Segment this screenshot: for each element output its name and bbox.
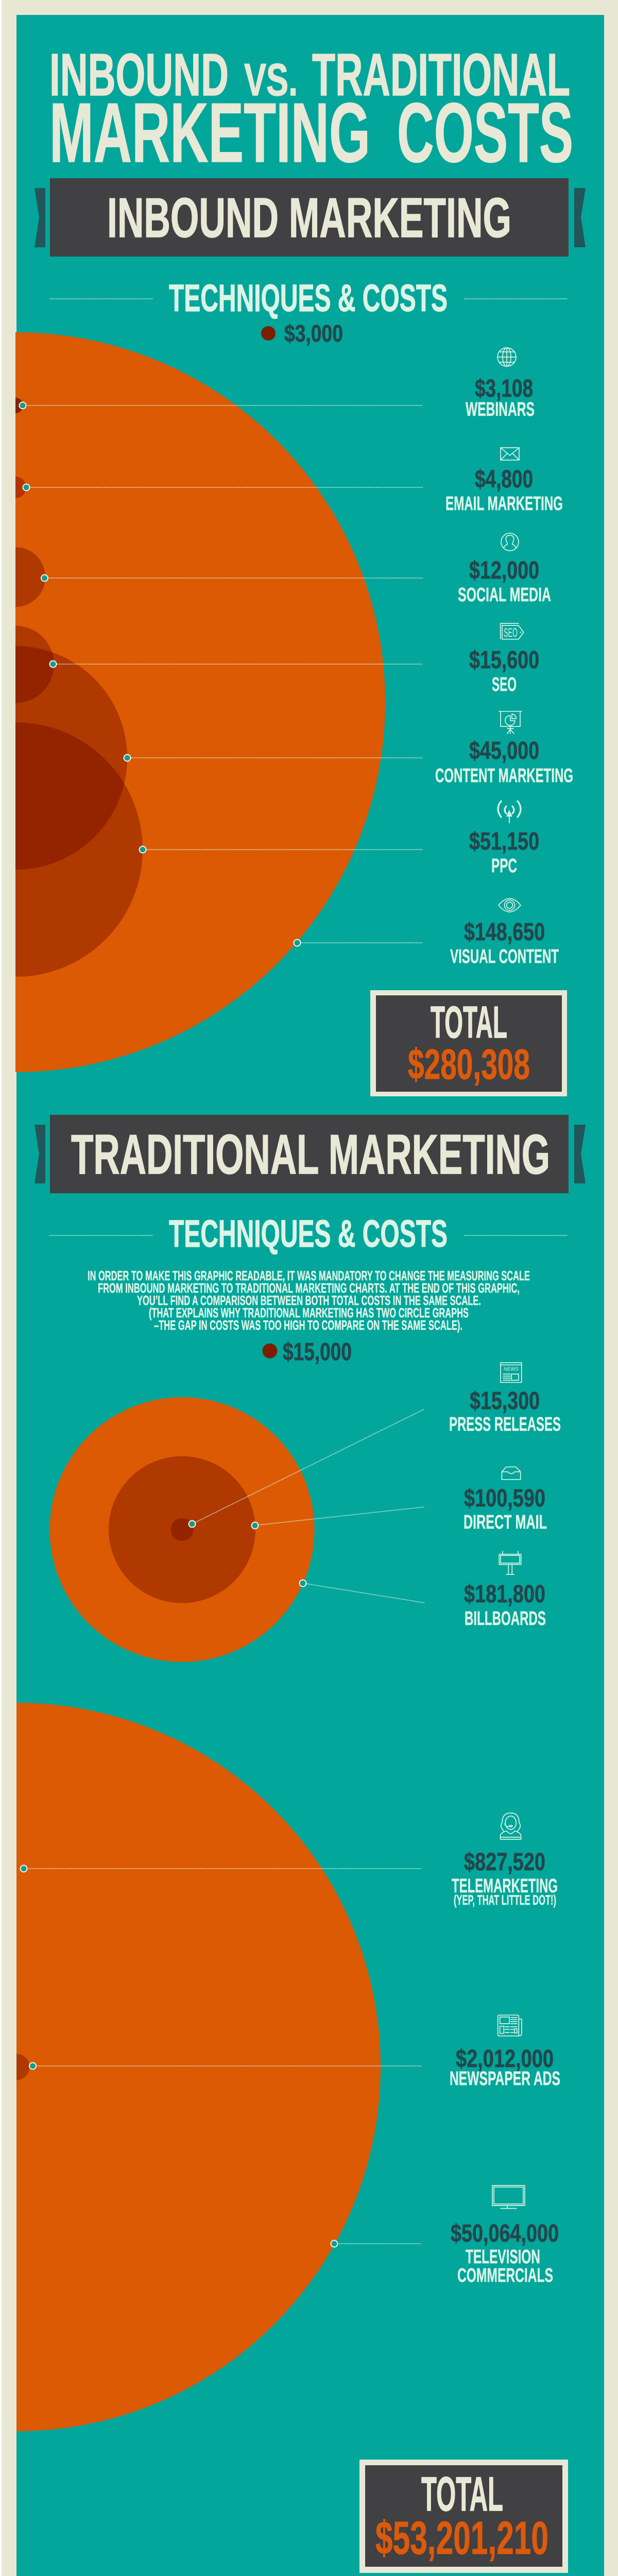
icon: envelope xyxy=(501,448,519,460)
item: seo: SEO xyxy=(492,674,517,696)
icon: seo tag: SEO xyxy=(504,626,518,640)
item: press releases: $15,300 xyxy=(470,1387,540,1415)
icon: newspaper xyxy=(498,2015,522,2036)
legend: inbound scale xyxy=(261,320,343,347)
item: ppc: PPC xyxy=(491,855,517,877)
heading: techniques and costs (inbound): TECHNIQUES & COSTS xyxy=(169,277,448,319)
item: seo xyxy=(469,623,539,696)
item: content marketing: $45,000 xyxy=(469,737,539,765)
icon: news page: NEWS xyxy=(504,1366,519,1372)
item: direct mail xyxy=(464,1467,547,1533)
circle chart: traditional small costs xyxy=(49,1397,424,1662)
banner: inbound marketing xyxy=(35,178,586,257)
item: newspaper ads: $2,012,000 xyxy=(456,2045,554,2073)
legend: traditional scale xyxy=(263,1338,352,1366)
icon: person xyxy=(501,533,519,551)
item: telemarketing: (YEP, THAT LITTLE DOT!) xyxy=(454,1892,556,1908)
item: billboards: $181,800 xyxy=(464,1581,545,1608)
callout: traditional total: TOTAL xyxy=(421,2467,503,2521)
circle chart: traditional large costs xyxy=(0,1703,421,2431)
item: television commercials: COMMERCIALS xyxy=(457,2265,553,2286)
item: billboards xyxy=(464,1551,546,1630)
item: webinars: $3,108 xyxy=(475,375,533,402)
icon: television xyxy=(492,2185,525,2208)
icon: globe xyxy=(497,348,516,366)
item: billboards: BILLBOARDS xyxy=(465,1608,546,1630)
item: newspaper ads: NEWSPAPER ADS xyxy=(450,2068,560,2090)
item: visual content: $148,650 xyxy=(464,919,545,946)
icon: antenna signal xyxy=(498,801,521,823)
icon: presentation board xyxy=(499,711,522,734)
item: ppc xyxy=(469,801,539,877)
text block: scale note xyxy=(88,1268,530,1333)
item: direct mail: DIRECT MAIL xyxy=(464,1512,547,1533)
item: webinars: WEBINARS xyxy=(466,399,535,420)
icon: telephone operator xyxy=(501,1813,521,1839)
legend: traditional scale: $15,000 xyxy=(283,1338,352,1366)
heading: techniques and costs (traditional): TECHNIQUES & COSTS xyxy=(169,1212,448,1255)
item: telemarketing xyxy=(452,1813,558,1908)
item: telemarketing: $827,520 xyxy=(464,1849,545,1876)
title: VS. xyxy=(244,54,298,105)
item: telemarketing: TELEMARKETING xyxy=(452,1875,558,1897)
callout: inbound total xyxy=(370,990,567,1096)
legend: inbound scale: $3,000 xyxy=(284,320,343,347)
item: television commercials: $50,064,000 xyxy=(451,2220,559,2247)
item: social media xyxy=(458,533,551,606)
item: newspaper ads xyxy=(450,2015,560,2090)
item: visual content xyxy=(450,899,559,968)
callout: inbound total: TOTAL xyxy=(431,997,507,1047)
circle chart: inbound costs xyxy=(0,332,423,1072)
item: social media: $12,000 xyxy=(469,557,539,584)
icon: eye xyxy=(499,899,521,912)
item: visual content: VISUAL CONTENT xyxy=(450,946,559,968)
title: INBOUND xyxy=(49,41,229,108)
icon: billboard xyxy=(499,1551,521,1574)
item: webinars xyxy=(466,348,535,420)
item: social media: SOCIAL MEDIA xyxy=(458,584,551,606)
title: MARKETING xyxy=(49,86,370,180)
title xyxy=(49,41,573,180)
item: television commercials: TELEVISION xyxy=(466,2246,540,2268)
item: content marketing xyxy=(435,711,573,787)
icon: inbox tray xyxy=(502,1467,521,1480)
item: email marketing: $4,800 xyxy=(475,466,533,493)
item: ppc: $51,150 xyxy=(469,828,539,855)
item: television commercials xyxy=(451,2185,559,2286)
item: email marketing xyxy=(445,448,563,515)
item: press releases xyxy=(449,1363,561,1435)
icon: news page xyxy=(501,1363,522,1382)
item: direct mail: $100,590 xyxy=(464,1485,545,1512)
item: seo: $15,600 xyxy=(469,647,539,674)
callout: traditional total xyxy=(359,2460,568,2573)
callout: inbound total: $280,308 xyxy=(408,1040,530,1088)
